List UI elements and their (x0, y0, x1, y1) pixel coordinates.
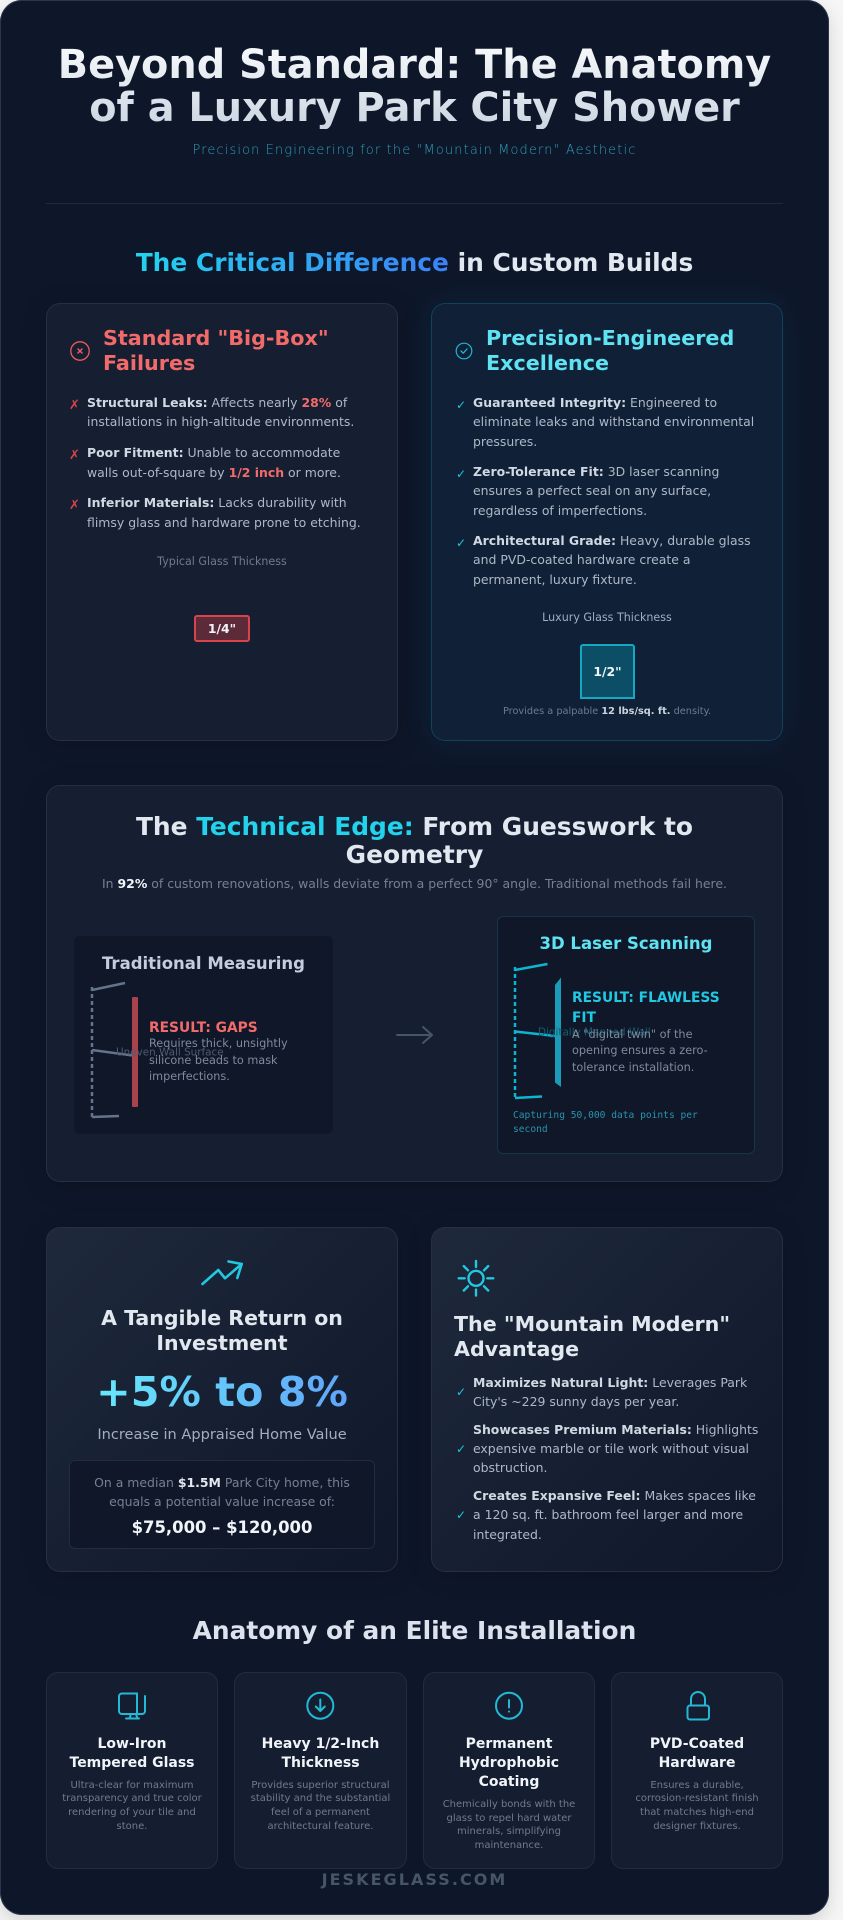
icon: arrow down circle (306, 1692, 334, 1720)
callout text (94, 1474, 350, 1509)
description: stability and the substantial (251, 1793, 390, 1804)
result: flawless fit: FIT (572, 1010, 596, 1026)
failure: structural leaks: ✗ (69, 398, 80, 413)
failure: poor fitment (69, 445, 341, 480)
title (611, 1735, 783, 1773)
thickness block: 1/2 inch (580, 644, 635, 699)
benefit: guaranteed integrity (456, 395, 754, 449)
footer brand: JESKEGLASS.COM (322, 1870, 507, 1889)
label: typical glass thickness: Typical Glass Thickness (157, 555, 287, 568)
benefit: architectural grade: and PVD-coated hardware create a (473, 552, 690, 567)
benefit: premium materials: obstruction. (473, 1460, 547, 1475)
card: pvd-coated hardware (611, 1672, 783, 1869)
stat caption: Increase in Appraised Home Value (97, 1426, 347, 1442)
heading: the critical difference: The Critical Difference in Custom Builds (136, 248, 693, 277)
heading: technical edge (136, 812, 693, 869)
benefit: natural light: City's ~229 sunny days per year. (473, 1394, 679, 1409)
failure: structural leaks (69, 395, 354, 429)
description: corrosion-resistant finish (635, 1793, 759, 1804)
benefit: architectural grade: ✓ (456, 536, 466, 550)
card: heavy 1/2-inch thickness (234, 1672, 407, 1869)
description (251, 1780, 390, 1832)
title: Coating (479, 1774, 539, 1790)
heading: tangible return (101, 1306, 343, 1354)
panel: return on investment (46, 1227, 398, 1572)
heading: 3d laser scanning: 3D Laser Scanning (540, 934, 712, 953)
result description: imperfections. (149, 1070, 230, 1083)
failure: structural leaks: installations in high-altitude environments. (87, 414, 354, 429)
card: permanent hydrophobic coating (423, 1672, 595, 1869)
heading: anatomy of an elite installation: Anatomy of an Elite Installation (193, 1616, 636, 1645)
title: of a Luxury Park City Shower (89, 84, 740, 130)
panel: traditional measuring (74, 936, 333, 1134)
description: Chemically bonds with the (443, 1799, 575, 1810)
icon: glass panel (118, 1692, 146, 1720)
title: Tempered Glass (70, 1755, 194, 1771)
description: Ultra-clear for maximum (70, 1780, 194, 1790)
benefit: architectural grade (456, 533, 751, 587)
label: luxury glass thickness: Luxury Glass Thickness (542, 611, 672, 624)
benefit: guaranteed integrity: ✓ (456, 398, 466, 412)
description (611, 1778, 783, 1834)
icon: check circle (456, 342, 472, 360)
icon: exclamation circle (495, 1692, 523, 1720)
title: Low-Iron (98, 1736, 166, 1752)
benefit: expansive feel: Creates Expansive Feel: Makes spaces like (473, 1488, 756, 1503)
result description (149, 1037, 288, 1083)
benefit: expansive feel: a 120 sq. ft. bathroom feel larger and more (473, 1507, 743, 1522)
note: density: Provides a palpable 12 lbs/sq. ft. density. (503, 706, 711, 717)
description: minerals, simplifying (457, 1826, 561, 1837)
callout text: On a median $1.5M Park City home, this (94, 1474, 350, 1490)
description: that matches high-end (640, 1807, 754, 1818)
result description: A "digital twin" of the (572, 1028, 692, 1040)
result description: silicone beads to mask (149, 1054, 278, 1066)
description: Provides superior structural (251, 1780, 390, 1790)
failure: inferior materials: Inferior Materials: Lacks durability with (87, 495, 347, 510)
failure: poor fitment: Poor Fitment: Unable to accommodate (87, 445, 340, 460)
thickness block: 1/4 inch (194, 615, 250, 642)
title: Heavy 1/2-Inch (262, 1736, 379, 1752)
description: maintenance. (475, 1840, 543, 1851)
heading: technical edge: Geometry (346, 840, 483, 869)
description: architectural feature. (268, 1821, 373, 1832)
callout value: $75,000 – $120,000 (132, 1518, 312, 1537)
diagram: uneven wall with gap: Uneven Wall Surface (116, 1046, 224, 1058)
result description: opening ensures a zero- (572, 1044, 708, 1057)
failure: inferior materials: flimsy glass and hardware prone to etching. (87, 515, 361, 530)
heading: tangible return: A Tangible Return on (101, 1306, 343, 1330)
result description: tolerance installation. (572, 1060, 694, 1074)
title (70, 1736, 194, 1771)
heading: failures: Standard "Big-Box" (103, 326, 329, 350)
card: low-iron tempered glass (46, 1672, 218, 1869)
title: Hydrophobic (459, 1755, 559, 1771)
callout: value increase (69, 1460, 375, 1549)
benefit: premium materials: ✓ (456, 1442, 466, 1456)
benefit: guaranteed integrity: pressures. (473, 434, 537, 449)
panel: standard big-box failures (46, 303, 398, 741)
thickness block: 1/4 inch: 1/4" (208, 621, 236, 636)
benefit: expansive feel (456, 1488, 756, 1542)
title (262, 1736, 379, 1771)
heading: traditional measuring: Traditional Measuring (102, 954, 305, 973)
icon: x circle (70, 341, 90, 361)
description: designer fixtures. (653, 1821, 741, 1832)
heading: excellence (486, 326, 734, 375)
subtitle: Precision Engineering for the "Mountain Modern" Aesthetic (193, 142, 636, 158)
heading: failures (103, 326, 329, 375)
data caption: second (513, 1124, 548, 1135)
intro text: In 92% of custom renovations, walls deviate from a perfect 90° angle. Traditional methods fail here. (102, 876, 727, 890)
heading: excellence: Excellence (486, 351, 609, 375)
title: Permanent (466, 1736, 552, 1752)
icon: trending up (201, 1260, 243, 1286)
benefit: premium materials: expensive marble or tile work without visual (473, 1441, 749, 1456)
description: transparency and true color (62, 1793, 202, 1804)
result: flawless fit: RESULT: FLAWLESS (572, 990, 720, 1006)
result: flawless fit (572, 990, 720, 1026)
data caption: Capturing 50,000 data points per (513, 1110, 698, 1121)
panel: 3d laser scanning (497, 916, 755, 1154)
result description (572, 1028, 708, 1074)
icon: lock (686, 1691, 710, 1720)
result: gaps: RESULT: GAPS (149, 1020, 258, 1036)
failure: poor fitment: walls out-of-square by 1/2 inch or more. (87, 465, 341, 480)
title (459, 1736, 559, 1790)
benefit: premium materials (456, 1422, 758, 1475)
benefit: guaranteed integrity: eliminate leaks and withstand environmental (473, 414, 754, 429)
title: Hardware (659, 1755, 735, 1771)
benefit: architectural grade: Architectural Grade: Heavy, durable glass (473, 533, 751, 548)
benefit: natural light (456, 1375, 747, 1409)
failure: inferior materials (69, 495, 361, 530)
panel: mountain modern advantage (431, 1227, 783, 1572)
benefit: premium materials: Showcases Premium Materials: Highlights (473, 1422, 758, 1436)
arrow (396, 1026, 433, 1044)
benefit: natural light: Maximizes Natural Light: Leverages Park (473, 1375, 747, 1390)
diagram: uneven wall with gap (90, 982, 224, 1118)
failure: structural leaks: Structural Leaks: Affects nearly 28% of (87, 395, 347, 410)
description (443, 1799, 575, 1851)
description (62, 1780, 202, 1832)
icon: sun (458, 1260, 494, 1297)
heading: excellence: Precision-Engineered (486, 326, 734, 350)
heading: technical edge: The Technical Edge: From Guesswork to (136, 812, 693, 841)
failure: poor fitment: ✗ (69, 448, 80, 463)
heading: mountain modern (454, 1312, 730, 1360)
benefit: natural light: ✓ (456, 1385, 466, 1399)
benefit: guaranteed integrity: Guaranteed Integrity: Engineered to (473, 395, 717, 410)
heading: failures: Failures (103, 351, 195, 375)
description: Ensures a durable, (650, 1780, 744, 1790)
data caption (513, 1110, 698, 1135)
callout text: equals a potential value increase of: (109, 1494, 335, 1509)
thickness block: 1/2 inch: 1/2" (593, 664, 622, 679)
title: PVD-Coated (650, 1736, 744, 1752)
diagram: digitally mapped wall: Digitally Mapped Wall (538, 1026, 651, 1038)
heading: mountain modern: The "Mountain Modern" (454, 1312, 730, 1336)
title: Beyond Standard: The Anatomy (58, 42, 771, 88)
benefit: expansive feel: integrated. (473, 1527, 542, 1542)
heading: mountain modern: Advantage (454, 1336, 579, 1360)
benefit: architectural grade: permanent, luxury fixture. (473, 572, 637, 587)
benefit: zero-tolerance fit (456, 464, 719, 518)
benefit: zero-tolerance fit: Zero-Tolerance Fit: 3D laser scanning (473, 464, 719, 479)
description: rendering of your tile and (68, 1807, 196, 1818)
failure: inferior materials: ✗ (69, 498, 80, 513)
panel: the technical edge (46, 785, 783, 1182)
diagram: digitally mapped wall (514, 962, 651, 1100)
description: feel of a permanent (271, 1807, 370, 1818)
benefit: expansive feel: ✓ (456, 1508, 466, 1522)
benefit: zero-tolerance fit: ensures a perfect seal on any surface, (473, 483, 711, 498)
heading: tangible return: Investment (156, 1330, 288, 1354)
stat: 5 to 8 percent: +5% to 8% (96, 1368, 348, 1416)
result description: Requires thick, unsightly (149, 1037, 288, 1050)
description: stone. (117, 1821, 147, 1832)
title: Thickness (281, 1755, 360, 1771)
benefit: zero-tolerance fit: regardless of imperfections. (473, 503, 647, 518)
benefit: zero-tolerance fit: ✓ (456, 467, 466, 481)
title (0, 44, 829, 129)
description: glass to repel hard water (446, 1813, 572, 1824)
panel: precision-engineered excellence (431, 303, 783, 741)
